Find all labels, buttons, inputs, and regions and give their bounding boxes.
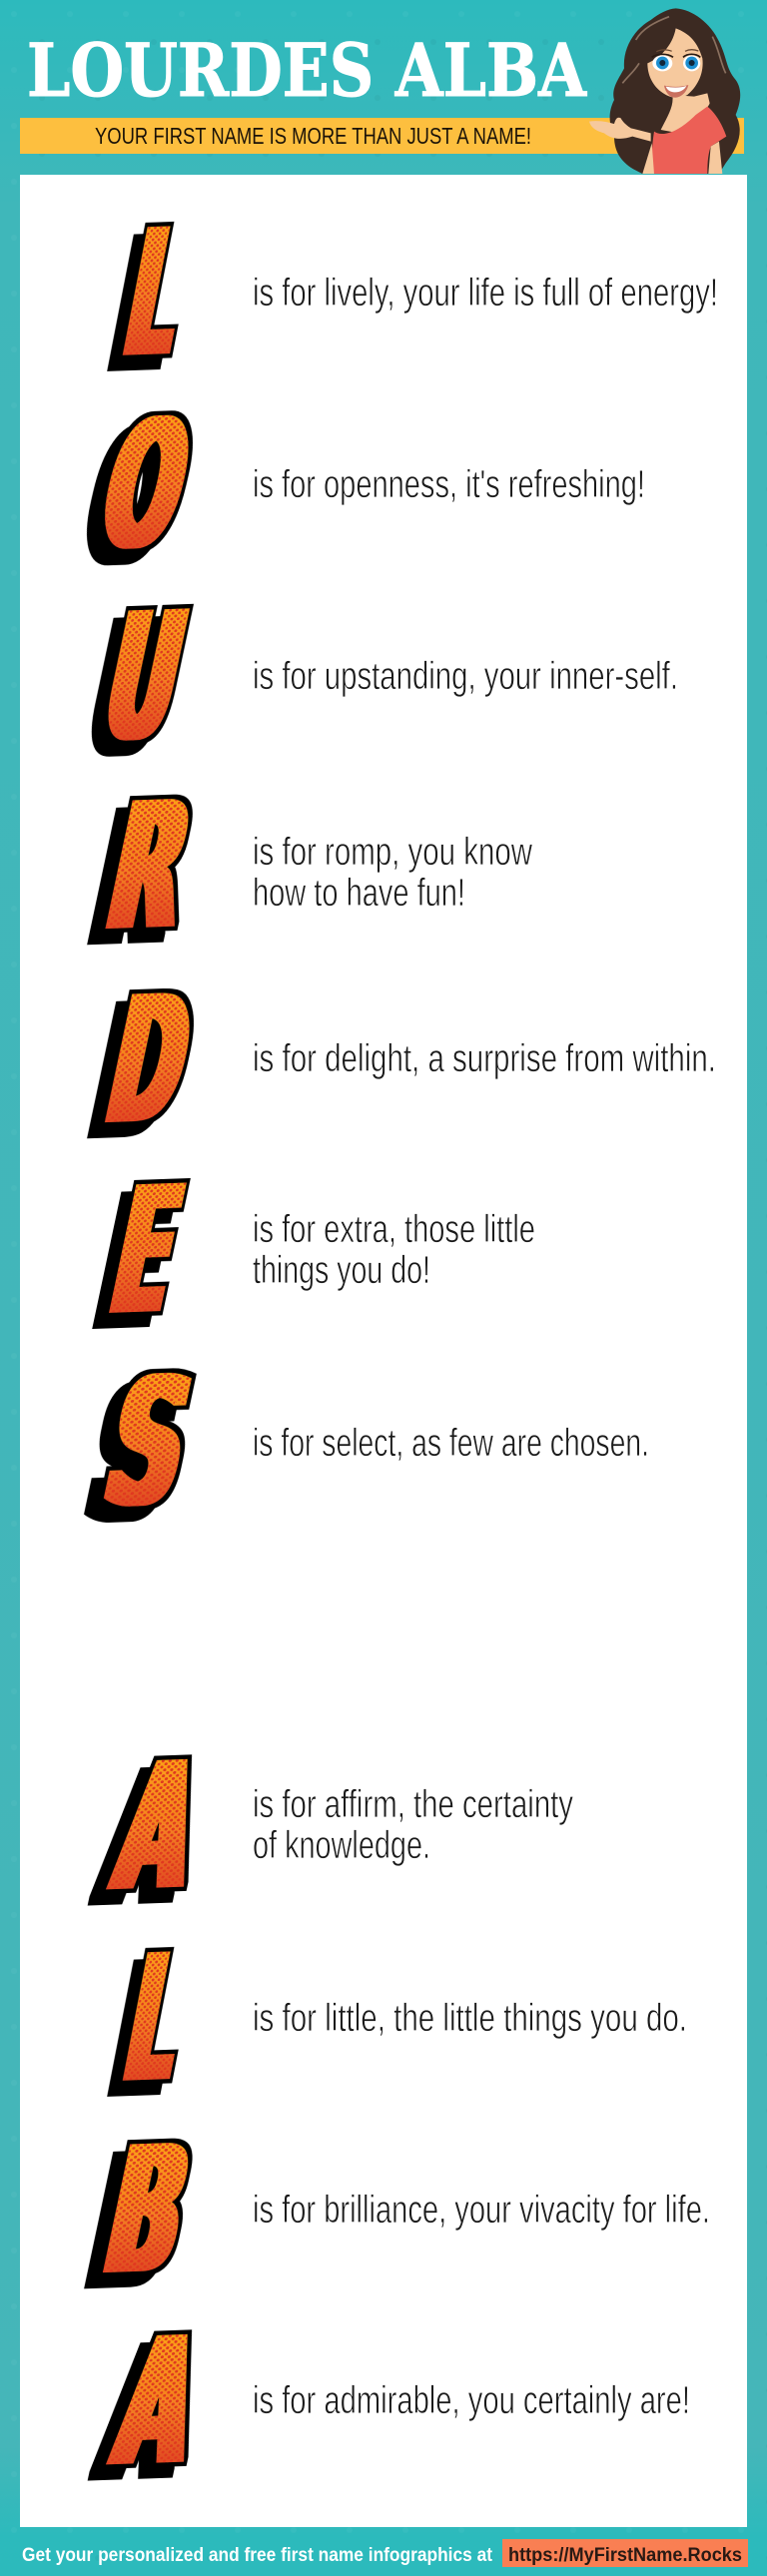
comic letter S: S xyxy=(92,1340,206,1548)
comic letter D: D xyxy=(88,958,201,1165)
comic letter S: S xyxy=(98,1340,212,1548)
comic letter D: D xyxy=(98,958,212,1165)
comic letter L: L xyxy=(112,192,199,397)
comic letter B: B xyxy=(91,2107,205,2314)
comic letter O: O xyxy=(81,382,201,590)
text lines: of knowledge. xyxy=(253,1824,430,1867)
text lines xyxy=(253,1208,535,1292)
letter row: U xyxy=(85,574,678,782)
letter row: L xyxy=(108,192,718,397)
letter row: L second xyxy=(108,1917,687,2123)
comic letter L: L xyxy=(112,1917,199,2123)
footer xyxy=(22,2539,748,2567)
comic letter L: L xyxy=(108,193,195,397)
comic letter A: A xyxy=(97,2299,208,2507)
comic letter S: S xyxy=(92,1340,206,1548)
comic letter L: L xyxy=(117,1917,203,2123)
comic letter A: A xyxy=(107,2299,219,2506)
letter row: E xyxy=(93,1148,535,1355)
comic letter U: U xyxy=(90,574,200,782)
comic letter D: D xyxy=(93,958,206,1165)
comic letter A: A xyxy=(102,1724,214,1931)
text lines: is for romp, you know xyxy=(253,831,533,874)
comic letter E: E xyxy=(98,1148,196,1355)
comic letter L: L xyxy=(112,1917,199,2123)
comic letter O: O xyxy=(91,381,211,589)
comic letter B: B xyxy=(86,2107,199,2314)
comic letter S: S xyxy=(86,1340,200,1548)
comic letter S: S xyxy=(92,1340,206,1548)
comic letter A: A xyxy=(102,2299,214,2506)
comic letter B: B xyxy=(91,2107,205,2314)
comic letter E: E xyxy=(98,1148,196,1355)
comic letter E: E xyxy=(93,1148,191,1355)
text lines xyxy=(253,1783,573,1867)
comic letter B: B xyxy=(91,2107,205,2314)
comic letter A: A xyxy=(102,2299,214,2506)
comic letter L: L xyxy=(108,1918,195,2123)
comic letter D: D xyxy=(93,958,206,1165)
comic letter R: R xyxy=(94,763,206,970)
letter row: B xyxy=(86,2107,710,2314)
text lines: how to have fun! xyxy=(253,872,465,915)
footer text: Get your personalized and free first name infographics at xyxy=(22,2545,493,2566)
subtitle banner: YOUR FIRST NAME IS MORE THAN JUST A NAME! xyxy=(95,123,531,149)
comic letter A: A xyxy=(102,1724,214,1931)
text line: is for openness, it's refreshing! xyxy=(253,463,645,506)
comic letter O: O xyxy=(86,382,206,590)
icon: cartoon woman xyxy=(589,8,740,174)
comic letter R: R xyxy=(94,763,206,970)
subtitle banner xyxy=(20,118,744,154)
comic letter R: R xyxy=(88,763,201,971)
comic letter A: A xyxy=(102,1724,214,1931)
text lines: is for extra, those little xyxy=(253,1208,535,1251)
letter row: S xyxy=(86,1340,649,1548)
comic letter U: U xyxy=(90,574,200,782)
comic letter L: L xyxy=(112,192,199,397)
comic letter D: D xyxy=(93,958,206,1165)
comic letter U: U xyxy=(90,574,200,782)
footer url badge: https://MyFirstName.Rocks xyxy=(508,2545,742,2566)
comic letter R: R xyxy=(94,763,206,970)
title: LOURDES ALBA xyxy=(27,28,587,114)
letter row: R xyxy=(88,763,533,971)
comic letter L: L xyxy=(117,192,203,397)
comic letter L: L xyxy=(112,192,199,397)
comic letter O: O xyxy=(86,382,206,590)
letter row: A xyxy=(97,1724,573,1932)
comic letter U: U xyxy=(95,574,205,782)
letter row: O xyxy=(81,381,645,590)
text lines: things you do! xyxy=(253,1249,430,1292)
letter row: A second xyxy=(97,2299,690,2507)
text lines: is for affirm, the certainty xyxy=(253,1783,573,1826)
comic letter O: O xyxy=(86,382,206,590)
comic letter E: E xyxy=(98,1148,196,1355)
comic letter A: A xyxy=(107,1724,219,1931)
letter row: D xyxy=(88,958,716,1165)
comic letter A: A xyxy=(102,2299,214,2506)
comic letter R: R xyxy=(99,763,211,970)
text lines xyxy=(253,831,533,915)
comic letter L: L xyxy=(112,1917,199,2123)
comic letter B: B xyxy=(97,2107,210,2314)
comic letter U: U xyxy=(85,575,195,782)
comic letter E: E xyxy=(103,1148,201,1355)
comic letter A: A xyxy=(97,1724,208,1932)
